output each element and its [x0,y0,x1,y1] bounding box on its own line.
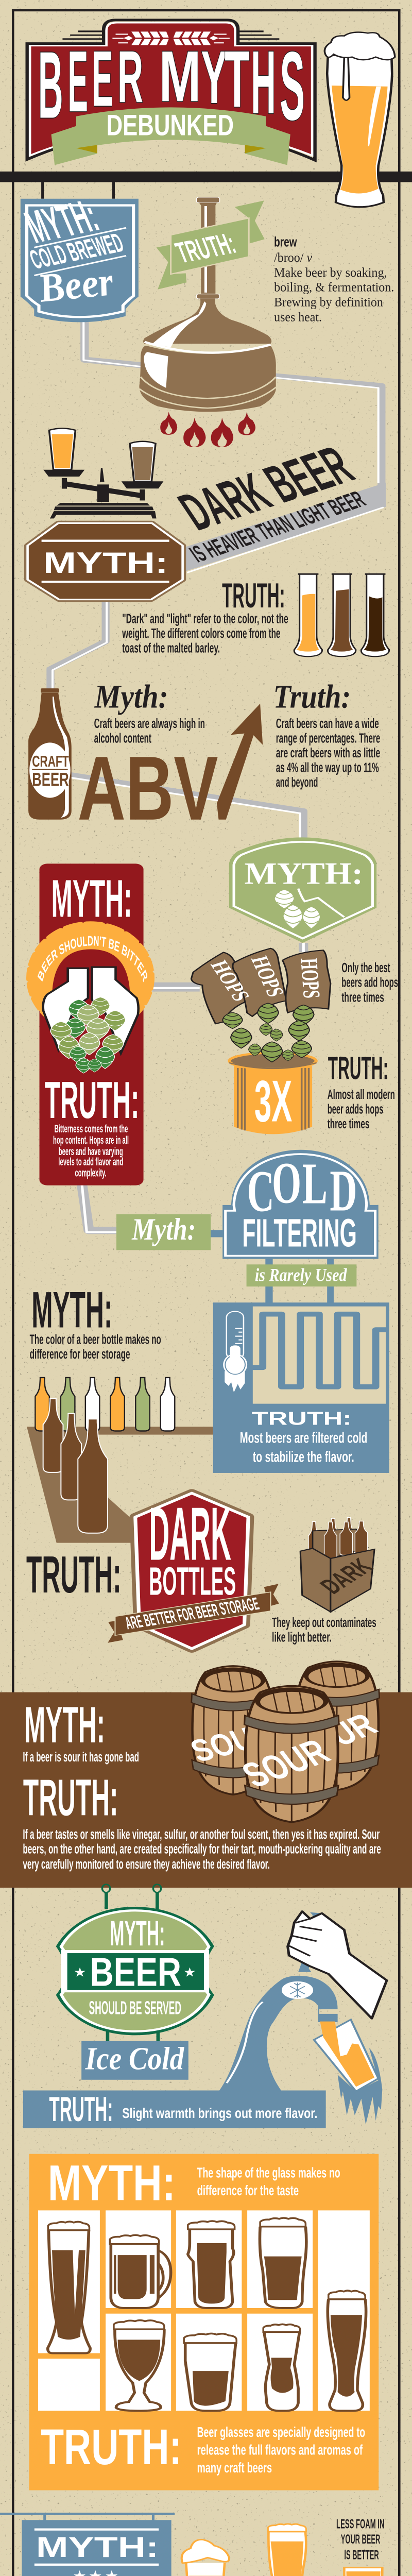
icon: beer on podium 1 [268,2524,306,2576]
panel: sour beer (brown band): TRUTH: [23,1769,118,1826]
text block: brew definition: /broo/ v [274,250,313,265]
sign: cold filtering [222,1150,379,1303]
icon: snowflake [290,1982,305,1998]
label: script myth: Myth: [131,1212,196,1247]
panel: glass shapes (orange): MYTH: [48,2156,176,2211]
panel: beer shouldn't be bitter (red): beers and have varying [59,1145,123,1158]
icon: goblet [114,2320,164,2411]
top black bar [0,172,412,182]
icon: tall wheat beer glass [324,32,395,207]
text: TRUTH: [45,1072,139,1129]
icon: hop sacks pouring into bucket: HOPS [246,954,289,999]
icon: wheat ornaments [112,31,230,45]
text: S [280,32,305,141]
sign: beer should be served ice cold [56,1885,214,2080]
badge: myth hops green [229,837,376,943]
section: dark bottles: TRUTH: [26,1546,122,1604]
icon: tilted beer glass with ice [314,2020,382,2125]
icon: shelf with bottles [27,1378,213,1543]
icon: beer on podium 3 [344,2568,382,2576]
section: craft beer ABV [28,679,380,839]
text block: brew definition [274,234,394,324]
text block: bottle color myth: MYTH: [31,1281,112,1338]
section: cold filtering [30,1150,389,1473]
icon: hop sacks pouring into bucket: HOPS [205,958,255,1004]
white cells [38,2210,370,2411]
icon: sour barrels: SOUR [184,1716,281,1769]
icon: flames under kettle [160,412,255,447]
icon: six pack carton: DARK [314,1554,379,1599]
icon: hand pulling beer tap [219,1911,387,2091]
label: is rarely used: is Rarely Used [255,1265,347,1285]
icon: straight pint [184,2333,236,2411]
title badge: Beer Myths Debunked [27,20,315,165]
panel: glass shapes (orange): many craft beers [197,2460,272,2476]
text: hop content. Hops are in all [53,1134,129,1146]
heading: script truth: Truth: [273,679,351,715]
ribbon: debunked [51,107,290,165]
chart: foam podium with three beers [174,2524,395,2576]
panel: myth cold brewed beer sign: MYTH: [18,190,106,253]
section: dark bottles [26,1492,379,1649]
icon: pilsner glass [48,2222,90,2353]
text: MYTH: [51,869,132,928]
text block: myth ABV [94,716,205,745]
sign: myth hanging shingle [0,2513,175,2576]
text block: bitterness: complexity. [75,1166,107,1179]
text: TRUTH: [222,575,285,615]
icon: beer mug [110,2235,171,2308]
sign: beer should be served ice cold: BEER [90,1950,181,1995]
icon: balance scale with two beers [43,428,163,518]
icon: hands holding hops [43,967,139,1073]
title: BEER MYTHS: H [251,32,276,132]
text block: brew definition: uses heat. [274,310,322,324]
section: dark bottles: BOTTLES [149,1560,236,1604]
text block: myth ABV: alcohol content [94,731,151,745]
heading: ABV with rising arrow: ABV [78,738,218,839]
icon: tall footed glass [263,2324,300,2411]
panel: sour beer (brown band) [0,1662,412,1888]
badge: myth hops green: MYTH: [244,856,363,891]
icon: weizen glass [328,2291,366,2411]
title: BEER MYTHS: R [117,36,143,118]
panel: glass shapes (orange): TRUTH: [41,2419,182,2475]
banner: truth on kettle post: TRUTH: [171,226,240,269]
icon: six pack carton [300,1517,379,1612]
sign: myth hanging shingle: MYTH: [36,2531,159,2563]
text block: brew definition: brew [274,234,297,250]
icon: thermometer [223,1311,247,1392]
icon: craft beer bottle [28,688,72,820]
seal: beer shouldn't be bitter [26,921,154,1018]
sign: myth octagon: MYTH: [43,546,168,579]
label: script myth [116,1212,211,1250]
panel: sour beer (brown band): If a beer is sour it has gone bad [23,1749,139,1765]
panel: myth cold brewed beer sign: Beer [34,259,118,311]
text block: hops truth [328,960,398,1131]
icon: sour barrels [184,1662,384,1822]
panel: filter coil and truth [213,1302,389,1473]
text block: bottle color myth: difference for beer storage [30,1347,130,1362]
icon: nonic pint [188,2221,235,2308]
text block: truth dark and light: toast of the malted barley. [122,640,220,655]
icon: three test tubes of beer [294,573,389,656]
title: BEER MYTHS: T [225,34,250,124]
section: cold filtering: The color of a beer bottle makes no [30,1332,161,1347]
ribbon: debunked: DEBUNKED [107,109,234,142]
panel: glass shapes (orange) [29,2154,379,2490]
title: BEER MYTHS: E [92,35,113,123]
panel: filter coil and truth: TRUTH: [252,1409,352,1429]
panel: truth slight warmth [23,2090,326,2129]
banner: truth on kettle post [157,200,265,290]
sign: cold filtering: COLD [247,1150,357,1224]
title: BEER MYTHS: E [68,33,88,130]
label: is rarely used [247,1264,356,1286]
icon: foamy beer on podium 2 [182,2539,229,2576]
icon: brew kettle with post [139,197,277,412]
label: ice cold [81,2040,188,2080]
sign: myth octagon [28,523,183,600]
panel: beer shouldn't be bitter (red): levels to add flavor and [58,1156,123,1168]
text block: truth dark and light [122,575,288,655]
heading: script myth: Myth: [94,679,168,715]
icon: 3X bucket [229,1053,317,1134]
icon: sour barrels: SOUR [234,1732,337,1795]
panel: beer shouldn't be bitter (red) [26,863,154,1185]
pipes connecting the sections [50,322,382,1232]
section: craft beer ABV: Craft beers are always high in [94,716,205,731]
sign: beer should be served ice cold: MYTH: [110,1913,165,1953]
title: BEER MYTHS: Y [201,36,227,119]
text block: truth ABV: and beyond [276,775,318,790]
text block: truth ABV [276,716,380,790]
text: Bitterness comes from the [55,1122,128,1135]
title: BEER MYTHS: B [38,32,63,138]
text block: contaminates [272,1615,376,1645]
heading: ABV with rising arrow [78,704,263,839]
text: SHOULD BE SERVED [89,1998,181,2018]
icon: craft beer bottle: BEER [32,768,69,790]
seal: beer shouldn't be bitter: BEER SHOULDN'T BE BITTER [38,936,147,982]
icon: shaker glass [260,2218,306,2308]
badge: dark bottles [108,1492,279,1649]
icon: craft beer bottle: CRAFT [32,752,69,770]
text block: bottle color myth [30,1281,161,1362]
title: BEER MYTHS: M [159,36,201,116]
label: ice cold: Ice Cold [85,2040,184,2076]
icon: hop sacks pouring into bucket [191,948,331,1134]
text block: bitterness [53,1122,129,1179]
text block: contaminates: like light better. [272,1630,332,1645]
icon: 3X bucket: 3X [254,1068,292,1134]
panel: sour beer (brown band): MYTH: [24,1697,105,1754]
text: COLD BREWED [25,227,128,275]
icon: hop sacks pouring into bucket: HOPS [296,958,325,998]
text block: less foam is better [336,2517,384,2562]
panel: myth cold brewed beer sign [18,182,139,322]
banner: dark beer is heavier than light beer [168,435,386,572]
panel: glass shapes (orange): difference for the taste [197,2183,299,2199]
panel: truth slight warmth: TRUTH: [49,2090,113,2129]
